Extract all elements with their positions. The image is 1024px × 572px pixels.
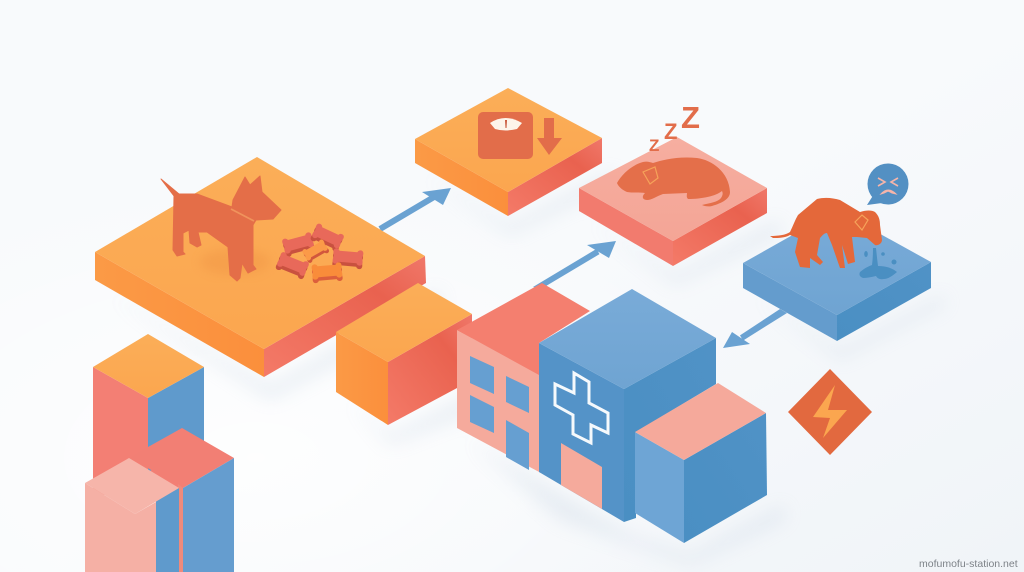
icon: sick dog <box>770 198 882 268</box>
icon: sleep Zzz: Z <box>649 136 659 155</box>
icon: vomit puddle <box>859 248 897 279</box>
hospital: left wing <box>457 283 590 473</box>
arrow: hospital up to lethargy <box>533 241 616 289</box>
panel: hospital building <box>457 283 767 543</box>
tower: orange top <box>93 334 204 495</box>
panel: weight loss block <box>415 88 602 216</box>
arrow: food platform to weight loss <box>378 188 451 232</box>
panel: left stacked towers <box>85 334 234 572</box>
icon: bathroom scale <box>478 112 533 159</box>
panel: vomiting block <box>743 164 931 341</box>
icon: down arrow <box>537 118 562 155</box>
panel: orange cube <box>336 283 472 425</box>
hospital door <box>561 443 602 509</box>
icon: sleep Zzz: Z <box>681 100 700 135</box>
watermark: mofumofu-station.net <box>919 558 1018 570</box>
icon: medical cross <box>555 373 608 443</box>
panel: food platform <box>95 157 426 377</box>
icon: lightning warning diamond <box>788 369 872 455</box>
arrow: vomiting to hospital <box>723 309 787 348</box>
dog collar <box>231 209 254 221</box>
hospital: main tower <box>539 289 716 522</box>
tower: pink top <box>85 458 179 572</box>
icon: standing dog <box>161 176 281 281</box>
hospital: front cube <box>635 383 767 543</box>
icon: sleep Zzz: Z <box>664 119 677 144</box>
icon: sick face speech bubble <box>867 164 908 205</box>
tower: salmon top <box>130 428 234 572</box>
panel: lethargy block <box>579 100 767 266</box>
icon: sleep Zzz <box>649 100 700 155</box>
icon: sleeping dog <box>617 157 730 206</box>
icon: pile of bones <box>275 223 364 283</box>
